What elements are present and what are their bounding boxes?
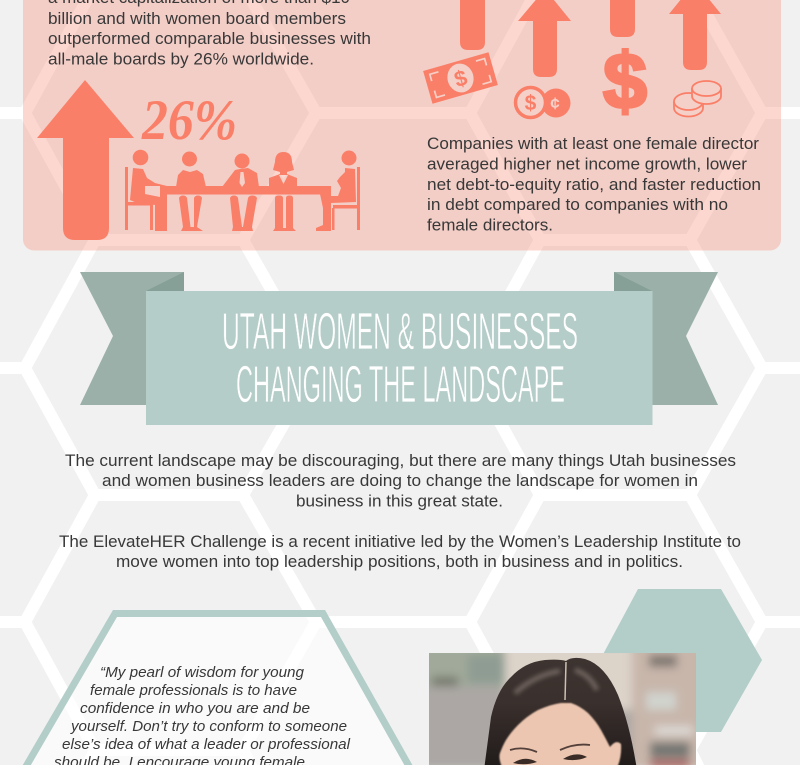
icon: arrow over dollar sign: $ xyxy=(603,36,647,125)
face xyxy=(499,703,621,765)
text block: female directors: female directors. xyxy=(427,216,553,234)
left eyebrow xyxy=(510,748,537,752)
panel background xyxy=(23,0,781,250)
banner left tail xyxy=(80,272,184,405)
icon: arrow over coin stack xyxy=(669,0,721,116)
hair highlights xyxy=(515,670,597,693)
quote text: yourself. Don’t try to conform to someone xyxy=(70,718,347,735)
cent coin: ¢ xyxy=(550,94,560,113)
right eyebrow xyxy=(560,745,590,750)
text block: intro: The current landscape may be discouraging, but there are many things Utah businesses xyxy=(65,452,736,470)
quote text: “My pearl of wisdom for young xyxy=(100,664,305,681)
text block: female directors: Companies with at least one female director xyxy=(427,135,760,153)
banner left fold xyxy=(146,272,184,291)
hair xyxy=(484,658,637,765)
quote text xyxy=(54,664,351,765)
icon: boardroom table with five people xyxy=(125,150,360,231)
text block: intro: The ElevateHER Challenge is a recent initiative led by the Women’s Leadership Institute to xyxy=(59,533,741,551)
banner body xyxy=(146,291,652,425)
hair part xyxy=(565,662,566,700)
decorative teal hexagon xyxy=(600,589,762,732)
icon: arrow over coins xyxy=(516,0,571,118)
text block: intro: move women into top leadership positions, both in business and in politics. xyxy=(116,553,683,571)
panel: quote hexagon xyxy=(21,614,414,765)
text block: board performance: billion and with women board members xyxy=(48,10,346,28)
quote text: female professionals is to have xyxy=(90,682,297,699)
quote hexagon frame xyxy=(21,614,414,765)
banner right fold xyxy=(614,272,652,291)
text block: female directors: net debt-to-equity ratio, and faster reduction xyxy=(427,176,761,194)
statistic: 26%: 26% xyxy=(141,89,237,152)
person 2 xyxy=(176,152,206,231)
quote text: else’s idea of what a leader or professional xyxy=(62,736,351,753)
photo: portrait of businesswoman xyxy=(429,653,696,765)
person 4 xyxy=(269,152,297,231)
banner right tail xyxy=(614,272,718,405)
text block: intro: and women business leaders are doing to change the landscape for women in xyxy=(102,472,698,490)
left eye xyxy=(513,759,537,764)
person 3 xyxy=(222,154,259,231)
photo background xyxy=(429,653,696,765)
text block: female directors: averaged higher net income growth, lower xyxy=(427,156,748,174)
panel: board performance xyxy=(23,0,781,250)
text block: board performance: all-male boards by 26% worldwide. xyxy=(48,50,314,68)
icon: arrow over banknote xyxy=(423,0,498,104)
text block: female directors xyxy=(427,135,761,234)
text block: female directors: in debt compared to companies with no xyxy=(427,196,728,214)
heading text xyxy=(222,303,578,414)
banner: section heading xyxy=(80,272,718,425)
person 5 and chair xyxy=(316,150,360,231)
table xyxy=(165,186,331,194)
text block: board performance: outperformed comparable businesses with xyxy=(48,30,371,48)
icon: big up arrow xyxy=(37,80,134,240)
quote text: confidence in who you are and be xyxy=(80,700,310,717)
text block: board performance xyxy=(48,0,371,68)
right eye xyxy=(563,754,587,760)
banknote: $ xyxy=(451,65,470,92)
person 1 and chair xyxy=(125,150,167,231)
text block: intro xyxy=(59,452,741,571)
dollar coin: $ xyxy=(525,92,537,115)
text block: intro: business in this great state. xyxy=(296,492,503,510)
